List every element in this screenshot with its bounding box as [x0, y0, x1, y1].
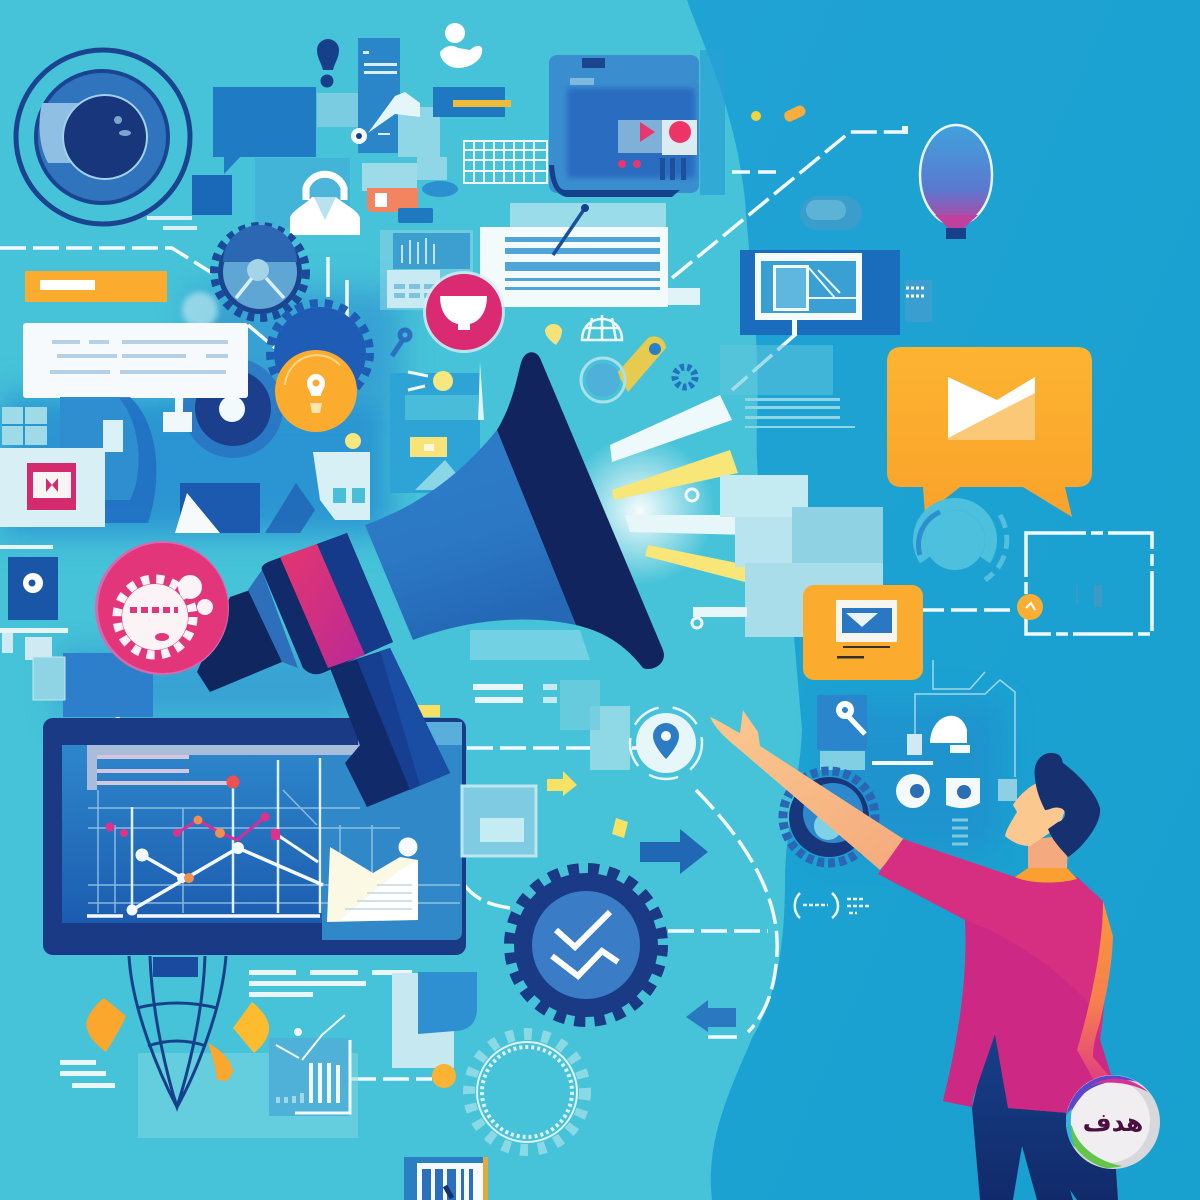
- icon: pale arrow and blocks: [351, 92, 447, 191]
- orange side: [1077, 901, 1113, 1082]
- small formula marks: [795, 893, 869, 918]
- panel: centre dashboard: [380, 230, 473, 310]
- blue strip: [248, 570, 298, 668]
- arrows: [547, 771, 736, 1032]
- megaphone: [197, 352, 664, 807]
- icon: top left target ring: [16, 50, 190, 224]
- icon: orange dot: [432, 1064, 456, 1088]
- person figure: [710, 710, 1118, 1200]
- icon: swirl target: [919, 504, 1007, 580]
- panel: central blue block: [390, 362, 484, 493]
- icon: exclamation mark: [317, 39, 339, 88]
- icon: location pin: [630, 707, 702, 779]
- panel: left pale tiles: [0, 397, 156, 527]
- flare: [497, 352, 664, 669]
- icon: dark gear: [270, 303, 370, 403]
- envelope: [327, 847, 418, 922]
- icon: user: [440, 23, 482, 68]
- icon: dark circle with white dot: [183, 358, 283, 458]
- icon: key: [392, 330, 410, 356]
- icon: white grid: [464, 141, 547, 183]
- hair: [1034, 753, 1100, 857]
- pill: [800, 196, 862, 230]
- face: [1005, 784, 1068, 846]
- chart grid: [88, 790, 460, 913]
- dark collar: [262, 533, 393, 674]
- cluster: tools near hand: [817, 660, 1017, 844]
- small pale panel with squares: [313, 452, 370, 520]
- panel: laptop window: [740, 250, 932, 335]
- label strip: [433, 87, 511, 117]
- chart: mini bars: [269, 1015, 350, 1116]
- panel: white speech card: [23, 323, 248, 432]
- panel: white document lines: [480, 203, 700, 307]
- icon: pink bowl badge: [423, 271, 505, 353]
- icon: pen stylus: [553, 204, 589, 255]
- text lines lower left: [60, 970, 412, 1088]
- icon: barcode box: [404, 1157, 488, 1200]
- badge: check gear: [510, 869, 662, 1021]
- panel: below megaphone strips: [417, 630, 630, 770]
- icons: orange leaves: [86, 998, 269, 1081]
- panel: tall document tile: [358, 38, 400, 153]
- panel: upper left speech bubble and square: [147, 87, 358, 230]
- megaphone rays: [565, 395, 748, 585]
- shirt: [878, 839, 1112, 1113]
- icon: orange lightbulb badge: [275, 350, 357, 432]
- panel: large chart monitor: [43, 718, 466, 955]
- back neck: [197, 590, 282, 692]
- icon: gear near person: [783, 771, 875, 863]
- icon: line gear: [469, 1034, 585, 1150]
- icon: orange envelope speech bubble: [887, 347, 1092, 517]
- panel: pale rectangle behind funnel: [138, 1053, 358, 1138]
- icon: small yellow dots: [345, 324, 562, 449]
- logo badge: [1066, 1075, 1160, 1169]
- grip: [330, 648, 450, 807]
- pink band: [280, 544, 365, 668]
- icon: funnel stand: [129, 956, 226, 1107]
- arm: [710, 710, 905, 870]
- trousers: [972, 1034, 1118, 1200]
- icon: dark square bubble: [0, 545, 153, 717]
- panel: mid right tiles: [686, 345, 883, 637]
- horn body: [365, 430, 576, 640]
- icon: pink gear badge: [95, 541, 229, 675]
- neck: [1028, 835, 1068, 872]
- panel: dark blue tile with white triangle: [175, 483, 315, 533]
- small salmon tag: [367, 181, 458, 223]
- monitor: top center: [549, 55, 699, 197]
- label: orange bar: [25, 271, 167, 302]
- dashed square: [1017, 533, 1152, 634]
- dashed connectors: [0, 132, 1015, 1079]
- icon: orange screen card: [803, 585, 923, 680]
- small orange marks: [751, 104, 908, 134]
- icon: padlock: [290, 174, 360, 235]
- icon: balloon: [920, 125, 992, 239]
- data lines: [132, 848, 323, 910]
- collar: [1015, 868, 1077, 883]
- icons: globe wrench gears: [581, 315, 695, 402]
- logo badge: هدف: [1083, 1109, 1143, 1137]
- panel: tile beside chart: [462, 786, 536, 856]
- icon: top gear: [182, 225, 306, 328]
- panel: lower tiles: [392, 972, 477, 1068]
